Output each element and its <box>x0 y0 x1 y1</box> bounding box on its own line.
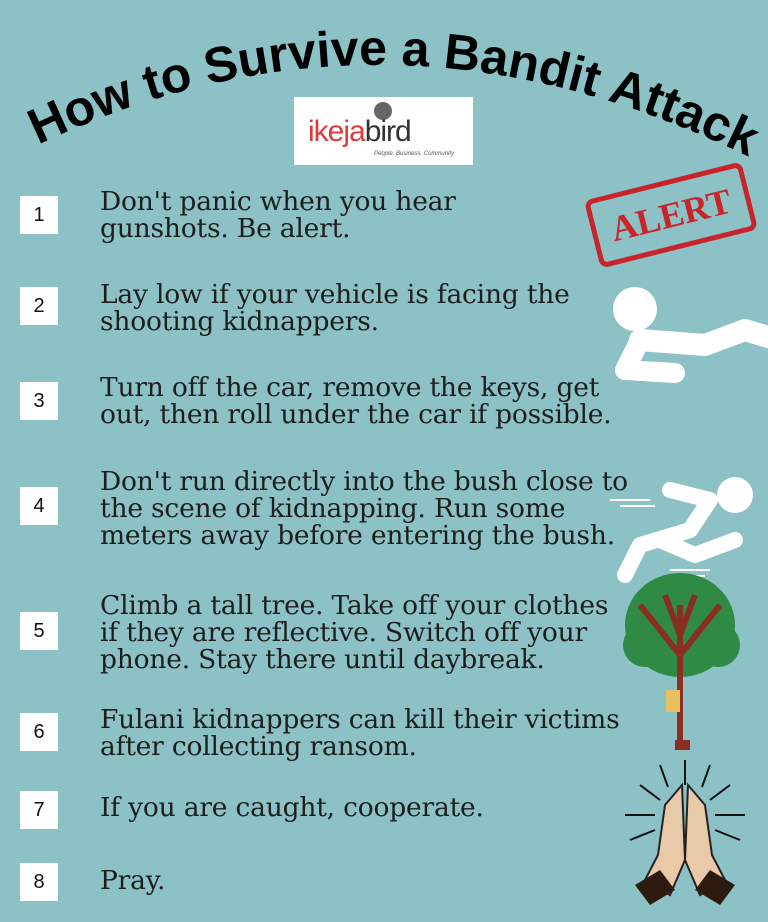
logo bird icon <box>374 102 392 120</box>
logo wordmark: ikejabird <box>308 115 411 148</box>
text: 4 <box>33 495 45 517</box>
item 8 <box>20 863 165 901</box>
text: 6 <box>33 721 45 743</box>
alert stamp <box>584 161 758 269</box>
text: out, then roll under the car if possible. <box>100 399 611 430</box>
text: Fulani kidnappers can kill their victims <box>100 704 620 735</box>
text: 3 <box>33 390 45 412</box>
text: Climb a tall tree. Take off your clothes <box>100 590 608 621</box>
text: 8 <box>33 871 45 893</box>
logo <box>294 97 473 165</box>
alert stamp: ALERT <box>607 181 735 249</box>
title: How to Survive a Bandit Attack <box>26 30 760 157</box>
text: the scene of kidnapping. Run some <box>100 493 565 524</box>
icon: tree with climber <box>623 573 740 750</box>
icon: crawling person <box>613 287 768 383</box>
text: 7 <box>33 799 45 821</box>
item 3 <box>20 372 611 430</box>
text: after collecting ransom. <box>100 731 417 762</box>
item 2 <box>20 279 570 337</box>
text: Turn off the car, remove the keys, get <box>100 372 599 403</box>
item 4 <box>20 466 628 551</box>
text: 5 <box>33 620 45 642</box>
tagline: People. Business. Community <box>374 151 454 157</box>
text: gunshots. Be alert. <box>100 213 350 244</box>
icon: praying hands <box>625 760 745 905</box>
text: phone. Stay there until daybreak. <box>100 644 545 675</box>
text: Don't panic when you hear <box>100 186 456 217</box>
item 1 <box>20 186 456 244</box>
item 5 <box>20 590 608 675</box>
text: Don't run directly into the bush close to <box>100 466 628 497</box>
text: 2 <box>33 295 45 317</box>
text: meters away before entering the bush. <box>100 520 615 551</box>
text: if they are reflective. Switch off your <box>100 617 587 648</box>
text: Lay low if your vehicle is facing the <box>100 279 570 310</box>
text: Pray. <box>100 865 165 896</box>
item 7 <box>20 791 484 829</box>
text: shooting kidnappers. <box>100 306 379 337</box>
icon: running person <box>610 477 753 583</box>
item 6 <box>20 704 620 762</box>
text: If you are caught, cooperate. <box>100 792 484 823</box>
text: 1 <box>33 204 45 226</box>
